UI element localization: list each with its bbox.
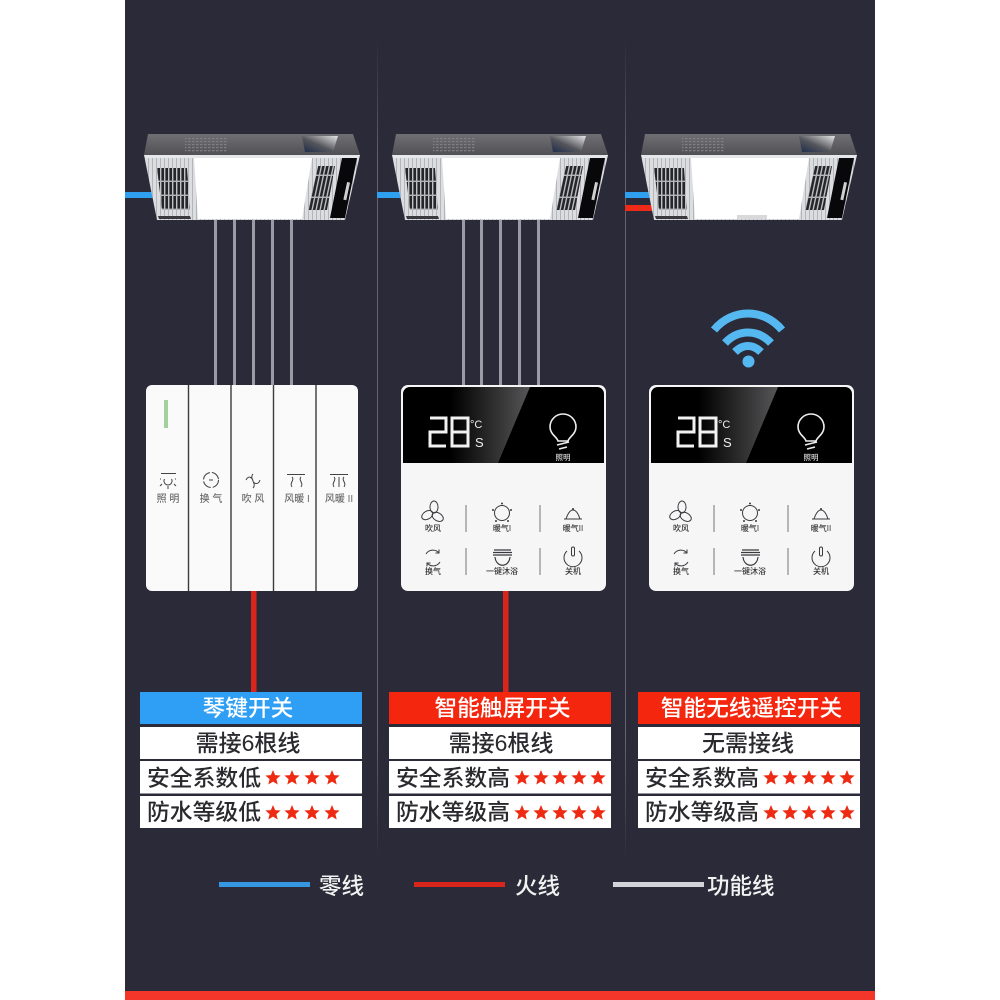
comparison table: 防水等级低 [147, 799, 261, 825]
function wires [462, 220, 540, 385]
touch switch panel: 关机 [565, 566, 581, 576]
column: rocker switch [125, 134, 362, 828]
touch switch panel: 暖气I [493, 523, 511, 533]
wireless switch panel: 暖气I [741, 523, 759, 533]
rocker switch panel [146, 385, 358, 591]
comparison table: 智能触屏开关 [434, 695, 571, 721]
touch switch panel [401, 385, 606, 591]
wireless switch panel: 一键沐浴 [734, 566, 766, 576]
legend: 火线 [515, 874, 560, 899]
comparison table: 无需接线 [702, 730, 794, 756]
bottom red band [125, 991, 875, 1000]
icon: wifi [714, 314, 782, 368]
live wire [503, 591, 508, 692]
neutral and live wires into heater [625, 192, 653, 211]
comparison table: 琴键开关 [203, 695, 293, 721]
touch switch panel: 吹风 [425, 523, 441, 533]
comparison table: 安全系数低 [147, 765, 261, 791]
wireless switch panel: °C [718, 419, 730, 431]
rocker switch panel: 吹 风 [242, 492, 264, 505]
comparison table [638, 692, 860, 828]
wireless switch panel: 暖气II [811, 523, 831, 533]
bath heater unit [641, 134, 857, 220]
wireless switch panel: 吹风 [673, 523, 689, 533]
wireless switch panel: 照明 [804, 453, 818, 462]
comparison table: 智能无线遥控开关 [661, 695, 842, 721]
touch switch panel: 照明 [556, 453, 570, 462]
comparison table [389, 692, 611, 828]
rocker switch panel: 风暖 II [325, 492, 353, 505]
bath heater unit [144, 134, 360, 220]
wireless switch panel: S [723, 435, 732, 450]
column: smart wireless remote switch [625, 134, 860, 828]
touch switch panel: 暖气II [563, 523, 583, 533]
touch switch panel: °C [470, 419, 482, 431]
comparison table: 安全系数高 [645, 765, 759, 791]
touch switch panel: S [475, 435, 484, 450]
legend [219, 874, 775, 899]
wireless switch panel: 换气 [673, 566, 689, 576]
rocker switch panel: 照 明 [157, 493, 179, 505]
function wires [214, 220, 293, 385]
rocker switch panel: 风暖 I [284, 492, 310, 505]
comparison table: 需接6根线 [449, 730, 553, 756]
comparison table: 防水等级高 [396, 799, 510, 825]
wireless switch panel [649, 385, 854, 591]
neutral wire into heater [377, 192, 403, 198]
comparison table [140, 692, 362, 828]
rocker switch panel: 换 气 [200, 492, 222, 505]
bath heater unit [392, 134, 608, 220]
comparison table: 防水等级高 [645, 799, 759, 825]
background panel [125, 0, 875, 1000]
touch switch panel: 换气 [425, 566, 441, 576]
comparison table: 需接6根线 [196, 730, 300, 756]
legend: 功能线 [707, 874, 775, 899]
wireless switch panel: 关机 [813, 566, 829, 576]
neutral wire into heater [125, 192, 155, 198]
legend: 零线 [319, 874, 364, 899]
comparison table: 安全系数高 [396, 765, 510, 791]
touch switch panel: 一键沐浴 [486, 566, 518, 576]
live wire [251, 591, 256, 692]
column: smart touch switch [377, 134, 611, 828]
